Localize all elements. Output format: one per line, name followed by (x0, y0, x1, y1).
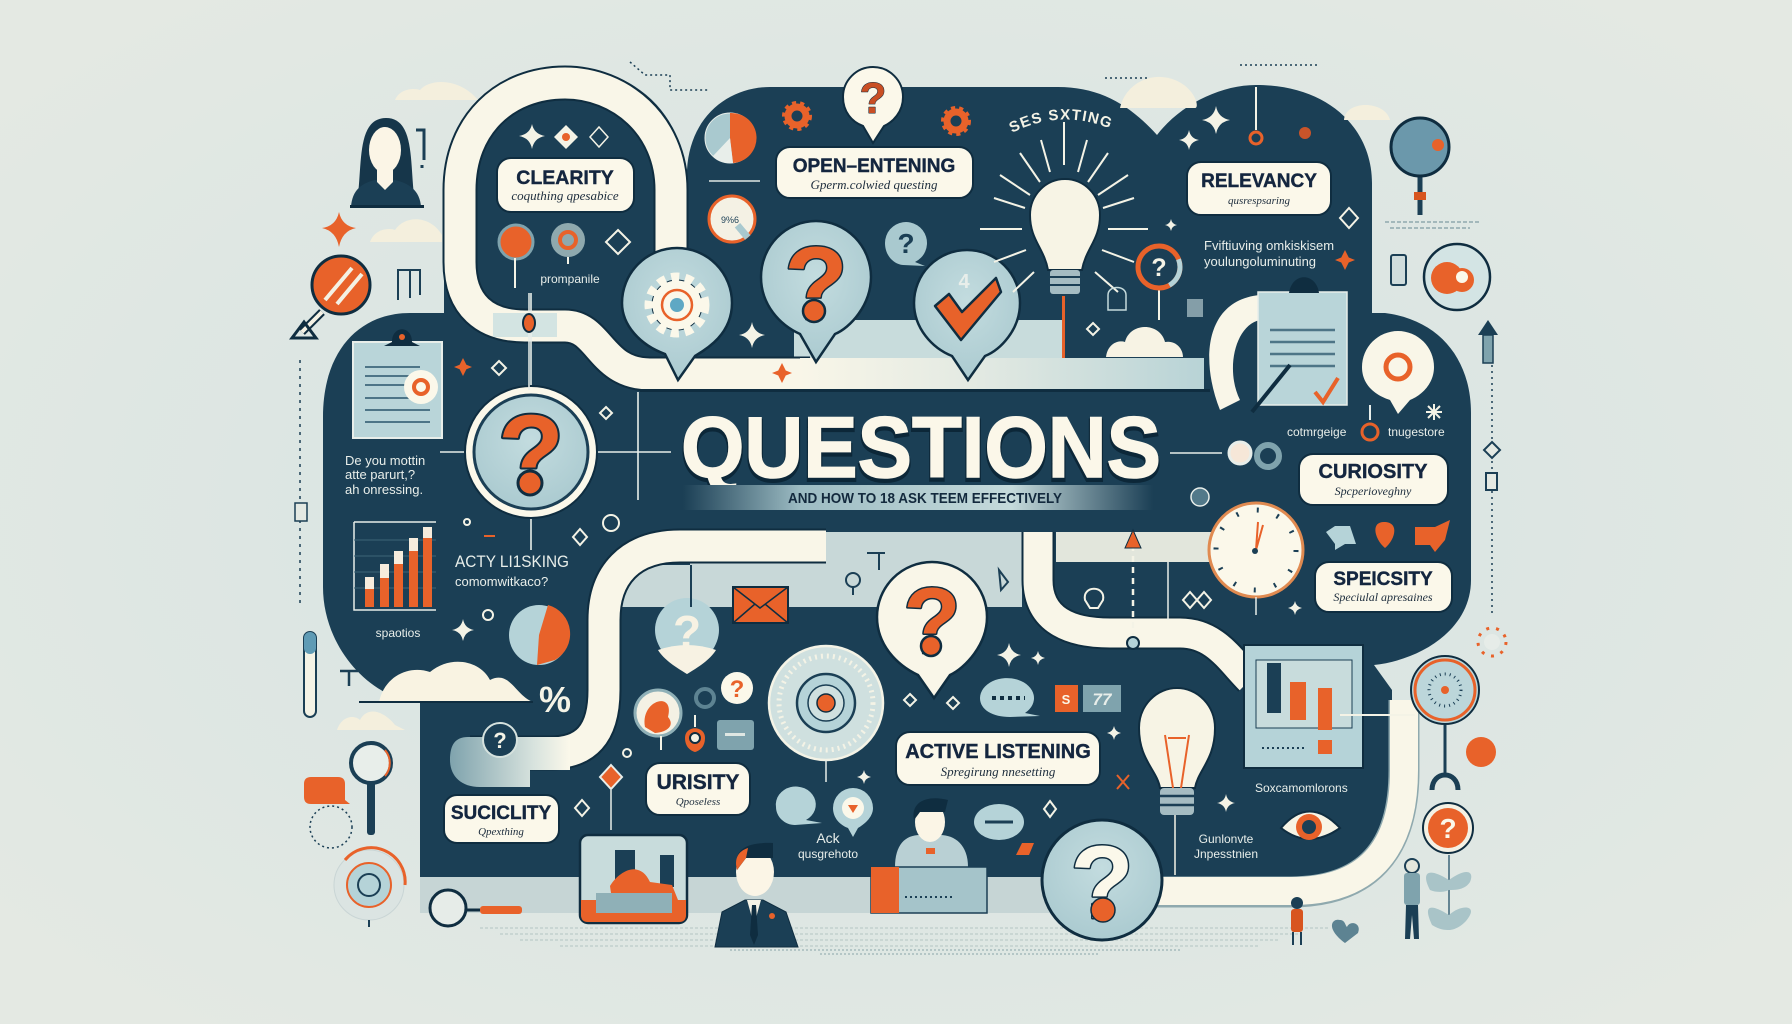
icon: dashed circle (310, 806, 352, 848)
text: ack note: qusgrehoto (798, 847, 858, 861)
text: left question copy: atte parurt,? (345, 467, 415, 482)
title: QUESTIONS: QUESTIONS (681, 400, 1161, 496)
text: left question copy: ah onressing. (345, 482, 423, 497)
icon: cream cloud on left lobe (359, 662, 533, 703)
icons: sparkle stars on board (452, 106, 1302, 812)
icon: clock (1209, 503, 1303, 615)
icon: small person (1291, 897, 1303, 945)
road fade to teal (800, 358, 1204, 389)
decoration strip: lower dashes (730, 950, 1180, 954)
icon: heart (1332, 920, 1359, 943)
icon: orange bead badge (1424, 244, 1490, 310)
icon: small teal question bubble (885, 222, 927, 266)
subtitle band: AND HOW TO 18 ASK TEEM EFFECTIVELY (788, 490, 1062, 507)
icon: radial dial (769, 646, 883, 782)
card: ACTIVE LISTENING: Spregirung nnesetting (941, 764, 1056, 779)
icon: small teal question bubble: ? (897, 228, 915, 259)
icon: large question bubble: ? (784, 226, 848, 342)
card: RELEVANCY: RELEVANCY (1201, 171, 1317, 192)
panel: light lower strip (420, 860, 1070, 913)
icon: left clipboard (353, 329, 442, 438)
icon: small gear (1191, 488, 1209, 506)
card: SPEICSITY: SPEICSITY (1333, 569, 1433, 590)
card: ACTIVE LISTENING: ACTIVE LISTENING (905, 741, 1091, 763)
panel: dark winding board (323, 67, 1471, 877)
icon: ring between labels (1362, 405, 1378, 440)
icon: diamond (606, 230, 630, 254)
icon: small orange question lens (635, 690, 681, 750)
icon: relevancy marker (1250, 87, 1311, 144)
icon: teal question pin (655, 598, 719, 674)
icon: woman portrait (350, 118, 424, 208)
icon: diamond marker on stem (600, 765, 622, 830)
icon: small gauge with pencil: 9%6 (721, 215, 739, 225)
icon: large question bubble (761, 221, 871, 362)
icon: cloud left (370, 219, 442, 242)
icon: orange ring question (1138, 246, 1180, 320)
icon: number tags (1055, 685, 1121, 712)
icon: pie orange and blue (509, 605, 570, 665)
card: CURIOSITY (1299, 454, 1448, 505)
text: left question copy (345, 453, 425, 497)
bar chart (354, 522, 436, 610)
icon: road question badge: ? (493, 728, 507, 753)
text: ring labels: tnugestore (1388, 425, 1445, 439)
card: OPEN-ENTENING (776, 147, 973, 198)
text: active listening note (455, 552, 569, 589)
icon: orange balloon (1466, 737, 1496, 767)
icon: number tags: 77 (1093, 690, 1113, 709)
card: SPEICSITY: Speciulal apresaines (1333, 590, 1433, 604)
card: RELEVANCY: qusrespsaring (1228, 195, 1290, 207)
icon: right clipboard with cream curve (1209, 277, 1347, 412)
card: URISITY: URISITY (657, 771, 739, 794)
card: URISITY: Qposeless (676, 796, 720, 808)
card: OPEN-ENTENING: OPEN–ENTENING (793, 156, 955, 177)
text: right top copy: Fviftiuving omkiskisem (1204, 238, 1334, 253)
card: ACTIVE LISTENING (896, 732, 1100, 785)
text: lower right caption: Soxcamomlorons (1255, 781, 1348, 795)
icons: small rings (464, 515, 1103, 757)
panel: light upper band (700, 320, 1204, 390)
icon: left dotted scale (295, 360, 307, 605)
icon: bottom light bulb (1139, 688, 1215, 875)
icon: small cream question: ? (730, 676, 744, 703)
panel: light lower band (620, 532, 1022, 607)
icon: cream cloud on board (1106, 327, 1183, 357)
icon: standing person (1404, 859, 1420, 939)
path: lower-right cream road (1038, 532, 1250, 680)
icon: counter desk (871, 867, 987, 913)
icon: globe on stand (1385, 118, 1480, 228)
text: left question copy: De you mottin (345, 453, 425, 468)
icon: gear bubble (622, 248, 732, 380)
icon: right chart panel (1244, 645, 1415, 768)
text: lower note: Gunlonvte (1199, 832, 1254, 846)
card: CLEARITY (497, 158, 634, 212)
icon: test tube pen (304, 632, 316, 717)
card: RELEVANCY (1187, 162, 1331, 215)
text: lower note (1194, 832, 1258, 861)
icon: ring (696, 689, 714, 707)
icon: orange question sign with plant: ? (1439, 813, 1457, 844)
text: ring labels: cotmrgeige (1287, 425, 1347, 439)
subtitle band (683, 485, 1153, 510)
icon: small cloud right (1344, 105, 1390, 120)
path: upper cream arch road (460, 83, 810, 374)
text: active listening note: comomwitkaco? (455, 574, 548, 589)
card: OPEN-ENTENING: Gperm.colwied questing (810, 177, 938, 192)
icon: orange four-point star (322, 212, 356, 247)
icon: right dial on stem (1411, 656, 1479, 790)
text: lower note: Jnpesstnien (1194, 847, 1258, 861)
icon: top gears (784, 103, 969, 134)
icon: checkmark bubble: 4 (958, 271, 970, 293)
card: SPEICSITY (1315, 562, 1452, 612)
icon: padlock and pattern tile (1108, 288, 1203, 317)
text: percent sign: % (539, 679, 571, 720)
text: active listening note: ACTY LI1SKING (455, 552, 569, 571)
icon: envelope (733, 587, 788, 623)
icon: gray tag (717, 720, 754, 750)
icon: orange pin (499, 225, 533, 288)
icon: picture frame (580, 835, 687, 923)
divider: line under upper band (640, 389, 1210, 392)
heading: SES SXTING curved: SES SXTING (1009, 109, 1112, 132)
icon: linked rings (1170, 442, 1279, 467)
road patch: teal crossing (493, 313, 557, 337)
connector: panel thin line (1167, 562, 1169, 620)
connector: gauge scale line (709, 180, 760, 182)
icon: asterisk mark (1426, 404, 1442, 420)
card: SUCICLITY: Qpexthing (478, 826, 524, 838)
card: CLEARITY: CLEARITY (516, 167, 614, 189)
card: CURIOSITY: Spcperioveghny (1335, 484, 1412, 498)
text: prompanile: prompanile (540, 272, 600, 286)
icon: small gauge with pencil (709, 196, 755, 242)
icon: top light bulb with rays (980, 122, 1148, 358)
icon: vertical magnifier (351, 743, 391, 835)
text: right top copy: youlungoluminuting (1204, 254, 1316, 269)
text: ack note: Ack (816, 830, 841, 846)
panel: top right cream strip (1056, 532, 1211, 562)
icon: orange magnifier (292, 256, 370, 338)
icon: road question badge (483, 723, 517, 757)
card: CURIOSITY: CURIOSITY (1319, 461, 1428, 483)
card: SUCICLITY: SUCICLITY (451, 803, 551, 824)
icons: CLEARITY stars (519, 124, 608, 149)
icon: orange question sign with plant (1423, 803, 1473, 930)
icon: large bottom question bubble (1042, 820, 1162, 941)
decoration strip: top dashes (630, 62, 1320, 90)
icon: small card icons (1326, 520, 1450, 552)
icon: top question bubble: ? (860, 74, 886, 123)
icon: hook bracket (398, 270, 420, 300)
path: lower-left cream road (470, 546, 826, 753)
icon: dash bubble (974, 804, 1024, 840)
icon: exclamation mark (416, 130, 424, 168)
path: bottom-right cream road (1120, 700, 1404, 892)
icon: teal speech bubble (776, 787, 822, 825)
icon: top question bubble (843, 67, 903, 143)
icon: large bottom question bubble: ? (1070, 825, 1134, 941)
icon: small cream question (721, 672, 753, 704)
icon: number tags: S (1062, 692, 1071, 707)
icon: up arrow (1478, 320, 1498, 363)
icons: orange sparkles (454, 250, 1355, 855)
icon: bottom large cream question bubble (877, 562, 987, 698)
pill: road end cap (450, 737, 570, 787)
icon: counter person (895, 798, 968, 867)
title: QUESTIONS: QUESTIONS (681, 403, 1161, 499)
icon: man in suit (715, 843, 798, 947)
icon: teal target pin (551, 223, 585, 264)
text: right top copy (1204, 238, 1334, 269)
icon: cloud top right (1120, 77, 1197, 108)
icon: orange speech label (304, 777, 350, 804)
icon: top pie chart (705, 113, 757, 163)
icon: checkmark bubble (914, 250, 1020, 380)
decoration strip: bottom halftone (480, 928, 1330, 946)
icon: cloud top left (395, 82, 478, 100)
icon: orange pin small (685, 715, 705, 752)
icon: dotted speech bubble (980, 678, 1040, 717)
icons: lower panel glyphs (691, 553, 1008, 607)
text: ack note (798, 830, 858, 861)
icon: eye (1281, 812, 1340, 840)
icon: small cloud bottom left (337, 712, 405, 730)
icon: central question circle (440, 293, 671, 550)
icon: right dotted scale (1484, 365, 1500, 615)
card: URISITY (646, 763, 750, 815)
card: CLEARITY: coquthing qpesabice (511, 188, 619, 203)
icon: central question circle: ? (498, 392, 564, 513)
icon: T mark (340, 671, 358, 686)
icon: teal question pin: ? (673, 606, 701, 658)
icon: road marker with dashed stem (1125, 530, 1141, 649)
icon: target dial left (334, 848, 405, 927)
icon: road pin marker (523, 293, 535, 390)
icon: heart bubble (833, 788, 873, 837)
card: SUCICLITY (444, 795, 559, 843)
icons: outline diamonds (492, 208, 1358, 817)
text: spaotios: spaotios (376, 626, 420, 640)
icon: orange sunburst (1478, 628, 1506, 656)
icon: switch (1391, 255, 1406, 285)
icon: small glass on strip (430, 890, 522, 926)
icon: cream target bubble (1362, 331, 1434, 414)
text: ring labels (1287, 425, 1445, 439)
icon: bottom large cream question bubble: ? (903, 568, 961, 673)
icon: orange ring question: ? (1151, 254, 1167, 282)
